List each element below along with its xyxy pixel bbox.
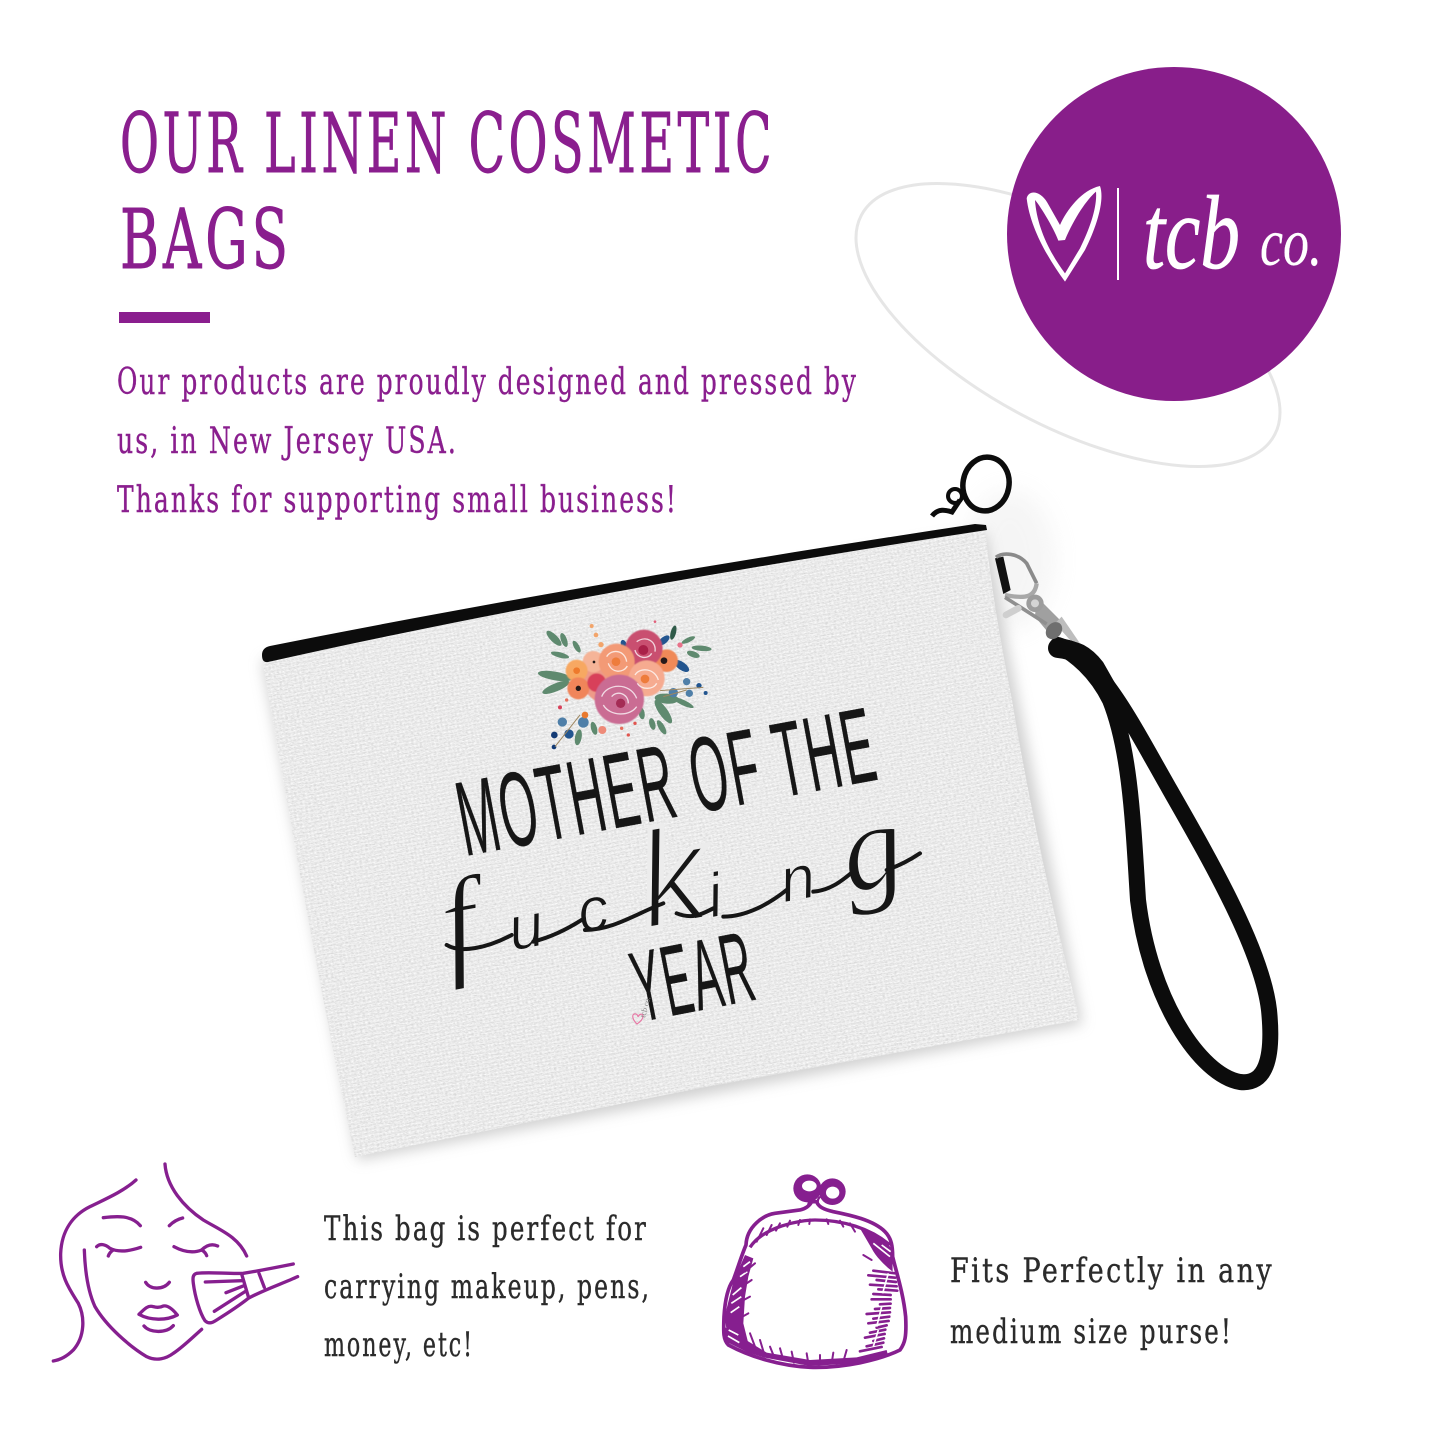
icon: coin purse (724, 1174, 906, 1367)
script flourish strokes (447, 853, 920, 949)
title: BAGS (120, 193, 292, 288)
icon: logo heart (1027, 186, 1101, 282)
caption: purse fit: medium size purse! (950, 1312, 1233, 1352)
title: OUR LINEN COSMETIC (120, 97, 775, 192)
linen weave texture (250, 515, 1090, 1165)
bag slogan: k (625, 795, 726, 959)
tiny bag signature: tcb co. (638, 996, 652, 1019)
bag slogan: YEAR (623, 910, 764, 1044)
bag slogan: f (430, 850, 501, 992)
intro text: Our products are proudly designed and pressed by (117, 362, 858, 403)
caption: purse fit: Fits Perfectly in any (950, 1251, 1274, 1291)
logo badge (1007, 67, 1341, 401)
right-side shading hatch (860, 1271, 897, 1351)
caption: purse fit (950, 1251, 1274, 1352)
product: linen bag with strap: MOTHER OF THE (448, 685, 886, 879)
intro text: Thanks for supporting small business! (117, 480, 678, 521)
caption: makeup use: carrying makeup, pens, (324, 1267, 651, 1307)
title rule (119, 312, 210, 323)
intro text (117, 362, 858, 521)
icon: face with makeup brush (53, 1164, 298, 1361)
floral bouquet (537, 620, 712, 749)
zipper ring (932, 453, 1013, 516)
bag slogan: i (702, 861, 730, 931)
logo divider (1117, 188, 1119, 280)
bag shadow (262, 532, 1082, 1160)
product: linen bag with strap (250, 453, 1270, 1165)
bag slogan: c (571, 873, 614, 947)
caption: makeup use: money, etc! (324, 1325, 474, 1365)
wrist strap (1058, 645, 1270, 1082)
logo wordmark: co. (1260, 204, 1322, 280)
caption: makeup use (324, 1209, 651, 1365)
bag body (262, 527, 1080, 1157)
tiny bag signature (633, 996, 652, 1024)
caption: makeup use: This bag is perfect for (324, 1209, 648, 1249)
title (120, 97, 775, 288)
bag slogan: g (829, 776, 913, 919)
orbit ellipse (814, 126, 1322, 524)
logo wordmark: tcb (1143, 174, 1240, 291)
bag slogan: n (774, 842, 821, 916)
soft hardware shadow (965, 490, 1055, 630)
intro text: us, in New Jersey USA. (117, 421, 458, 462)
silver clasp (995, 554, 1080, 643)
bag slogan: u (503, 890, 549, 964)
bag slogan (427, 685, 914, 1044)
zipper (262, 524, 987, 662)
